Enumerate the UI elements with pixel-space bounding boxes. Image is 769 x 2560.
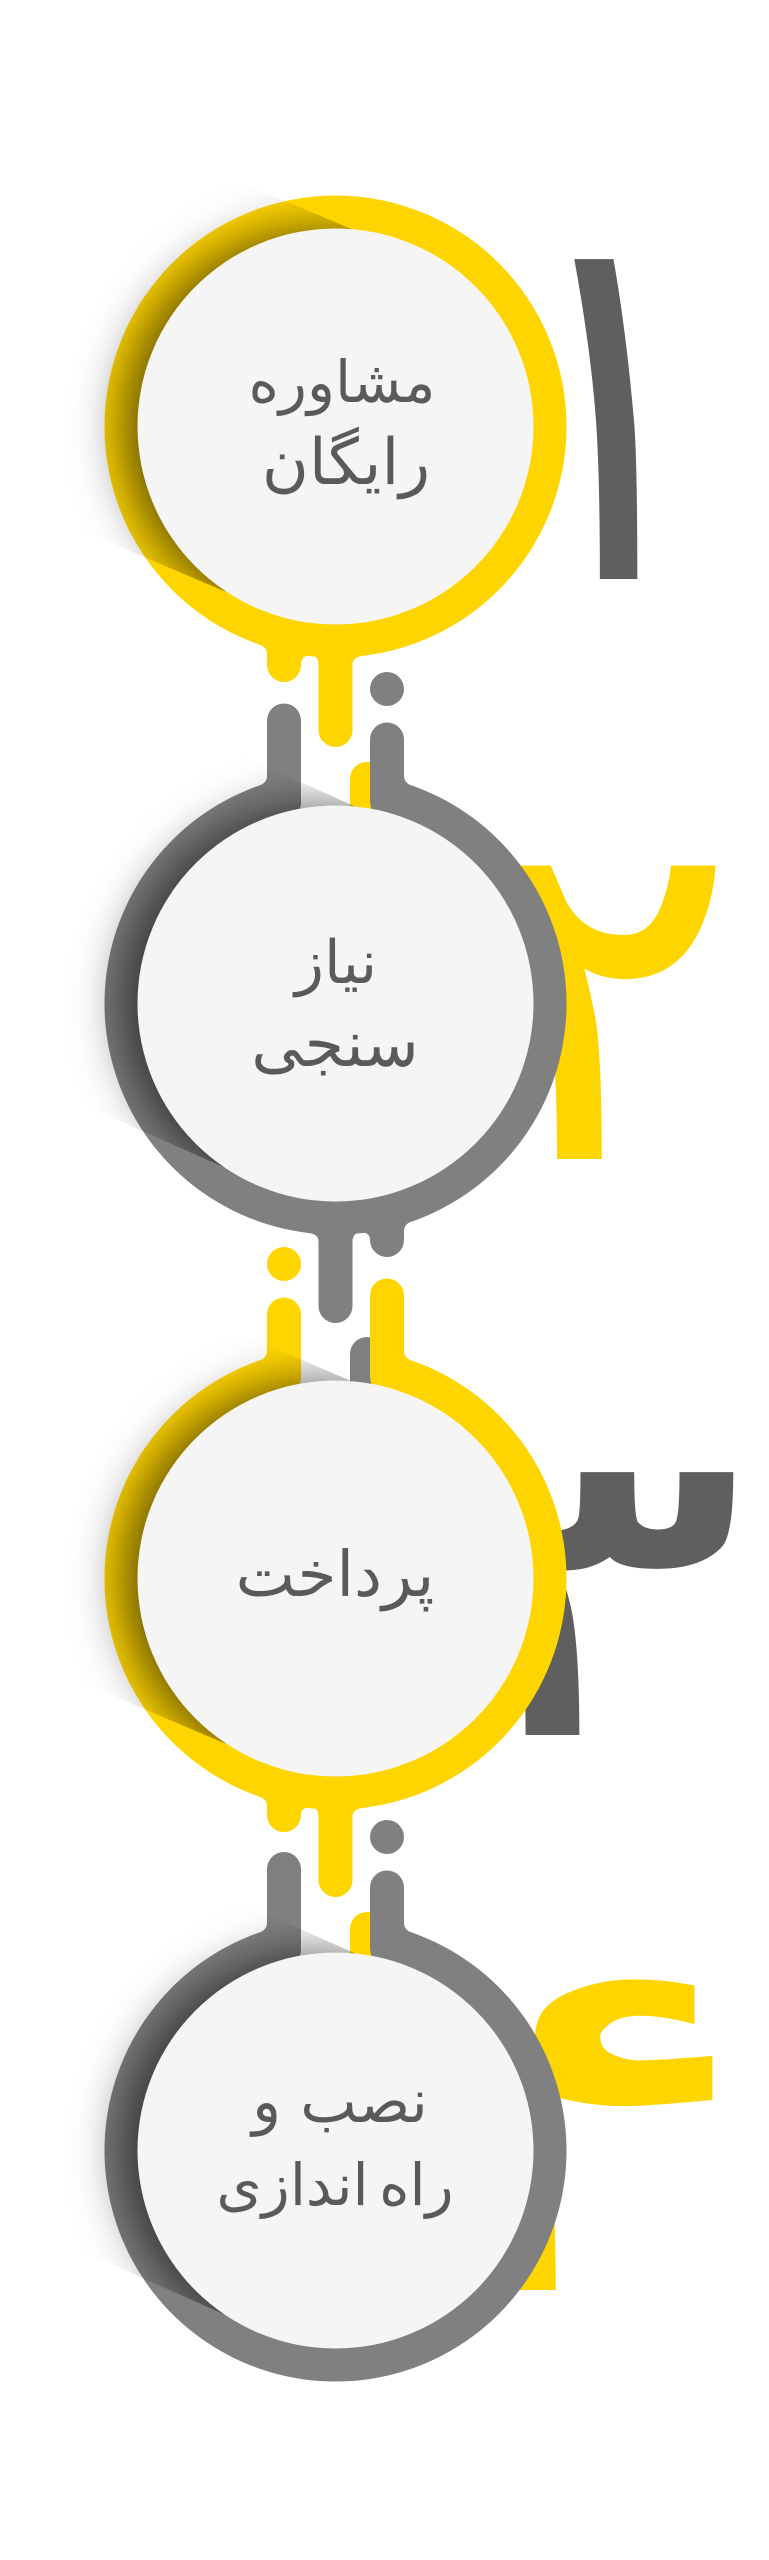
step 3 label: پرداخت (236, 1538, 434, 1612)
numeral 3: ۳ (437, 1354, 748, 1831)
step 1 shadow (86, 197, 352, 593)
step 2 label: سنجی (251, 1008, 419, 1082)
step 2 disc (138, 806, 534, 1202)
step 4 (86, 1852, 712, 2382)
dot above step 3 (267, 1247, 301, 1281)
step 2 (58, 704, 734, 1323)
step 1 label (249, 348, 435, 500)
step 4 label: راه اندازی (216, 2151, 454, 2219)
step 3 shadow (86, 1349, 352, 1745)
step 4 label (216, 2067, 454, 2219)
step 4 connector tab (350, 1912, 384, 1982)
step 2 shadow (86, 776, 356, 1168)
infographic: four step process (86, 196, 734, 2382)
step 1 (86, 196, 638, 747)
numeral 2: ۲ (486, 735, 734, 1265)
step 1 label: مشاوره (249, 348, 435, 417)
step 1 ring with drips (104, 196, 566, 747)
numeral 1: ۱ (544, 113, 676, 699)
step 4 shadow (86, 1922, 356, 2315)
step 2 connector tab (350, 762, 384, 832)
step 2 ring with stalks and drips (104, 704, 566, 1323)
step 1 disc (138, 228, 534, 624)
step 1 label: رایگان (262, 426, 430, 500)
step 2 label: نیاز (292, 928, 377, 998)
step 3 disc (138, 1380, 534, 1776)
step 2 label (251, 928, 419, 1082)
step 3 connector tab (350, 1337, 384, 1407)
step 4 disc (138, 1952, 534, 2348)
step 4 label: نصب و (249, 2067, 428, 2137)
dot above step 4 (370, 1820, 404, 1854)
step 3 ring with stalks and drips (104, 1278, 566, 1897)
dot above step 2 (370, 672, 404, 706)
step 4 ring with stalks (104, 1852, 566, 2382)
step 3 (60, 1278, 748, 1897)
numeral 4: ۴ (383, 1843, 757, 2402)
